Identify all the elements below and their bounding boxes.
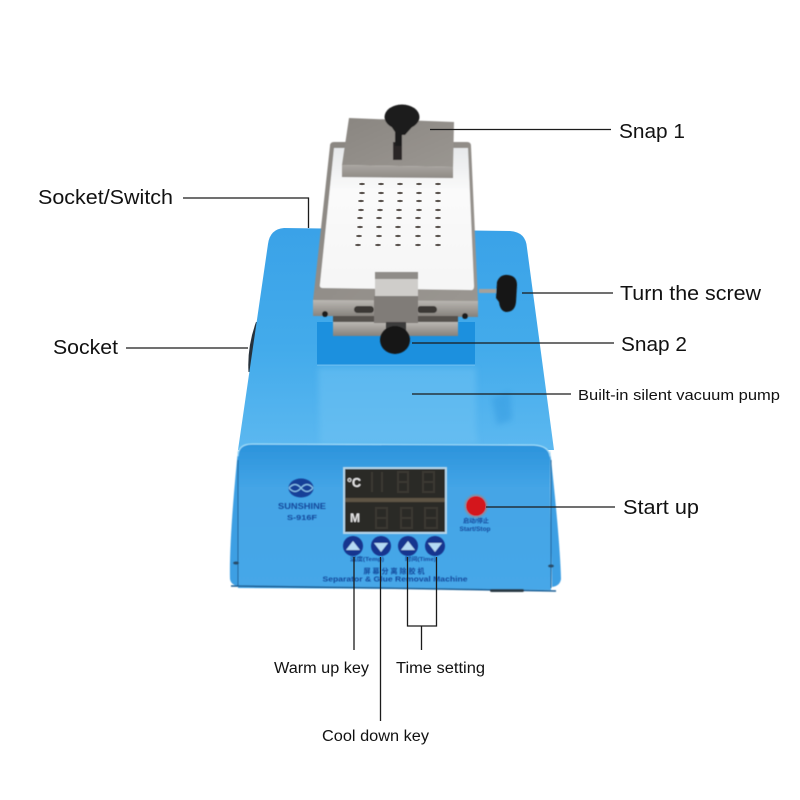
digital display — [343, 467, 447, 534]
label: Time setting: Time setting — [396, 660, 485, 677]
panel printed text: 温度(Temp) — [350, 555, 384, 563]
digital display: M — [350, 511, 360, 525]
label: Socket/Switch: Socket/Switch — [38, 186, 173, 209]
leader line: Cool down key — [380, 557, 382, 721]
label: Built-in silent vacuum pump: Built-in silent vacuum pump — [578, 388, 780, 404]
start stop button: 启动/停止 — [463, 517, 489, 525]
leader line: Snap 1 — [430, 128, 611, 130]
vacuum holes — [355, 183, 441, 246]
start stop button — [460, 494, 491, 533]
label: Turn the screw: Turn the screw — [620, 282, 761, 305]
snap 1 clamp — [342, 104, 454, 178]
leader line: Socket — [126, 347, 248, 349]
panel printed text — [322, 555, 468, 584]
label: Warm up key: Warm up key — [274, 660, 369, 677]
label: Snap 1: Snap 1 — [619, 120, 685, 143]
brand logo: SUNSHINE — [278, 501, 326, 511]
panel printed text: 时间(Time) — [405, 555, 436, 563]
panel printed text: 屏幕分离除胶机 — [364, 566, 424, 576]
panel printed text: Separator & Glue Removal Machine — [322, 574, 468, 584]
leader line: Turn the screw — [522, 292, 613, 294]
front panel — [230, 444, 561, 592]
brand logo — [278, 478, 326, 522]
start stop button: Start/Stop — [460, 526, 491, 533]
cover highlights — [317, 322, 512, 444]
leader line: Start up — [486, 506, 615, 508]
digital display: °C — [347, 476, 361, 490]
brand logo: S-916F — [287, 515, 318, 522]
leader line: Snap 2 — [412, 342, 614, 344]
machine side socket — [248, 322, 258, 372]
machine illustration — [230, 104, 561, 592]
leader line: Socket/Switch — [183, 198, 308, 228]
label: Start up: Start up — [623, 496, 699, 519]
label: Socket: Socket — [53, 336, 118, 359]
vacuum plate — [313, 142, 478, 336]
leader line: Time setting — [408, 557, 436, 650]
label: Cool down key: Cool down key — [322, 728, 429, 745]
machine top cover — [238, 228, 554, 450]
control keys — [343, 536, 445, 556]
label: Snap 2: Snap 2 — [621, 333, 687, 356]
snap 2 clamp — [374, 272, 418, 354]
turn screw knob — [479, 275, 517, 312]
leader line: Built-in silent vacuum pump — [412, 393, 571, 395]
leader line: Warm up key — [353, 557, 355, 650]
